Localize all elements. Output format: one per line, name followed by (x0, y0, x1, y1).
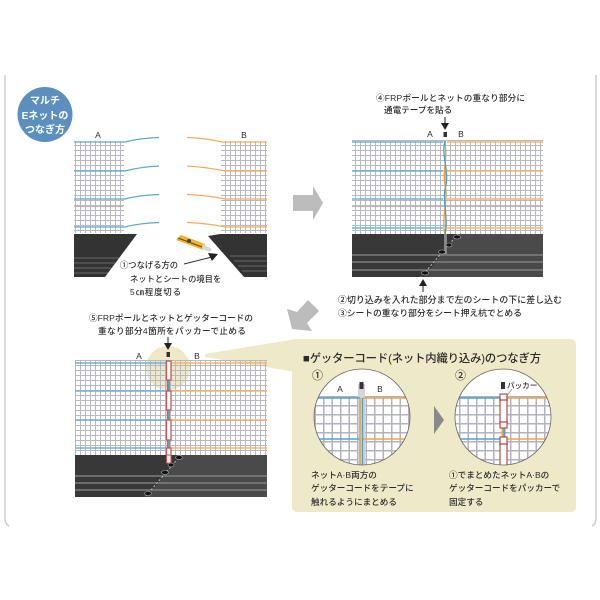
pole with clips (166, 361, 171, 462)
sheet (75, 455, 267, 497)
sheet A (74, 234, 137, 277)
step 4 caption: ④FRPポールとネットの重なり部分に (376, 92, 525, 103)
net (352, 140, 543, 234)
arrow: step 1 to 2 (293, 186, 323, 220)
arrow up to stake (419, 279, 427, 292)
caption 1: ゲッターコードをテープに (311, 482, 414, 493)
step 5 caption: ⑤FRPポールとネットとゲッターコードの (89, 312, 253, 323)
number 2: ② (455, 369, 466, 382)
highlight circle and pointer (146, 339, 296, 390)
step 1 caption (120, 260, 221, 297)
badge: マルチEネットのつなぎ方: つなぎ方 (25, 123, 65, 136)
step 4 caption: 通電テープを貼る (384, 104, 452, 115)
step 2 and 3 captions (338, 294, 562, 318)
step 1 caption: 5㎝程度切る (130, 287, 181, 297)
caption 1: ネットA·B両方の (311, 469, 377, 480)
sheet B (208, 234, 267, 277)
net A (74, 138, 159, 233)
outer frame (5, 75, 596, 526)
step 1 caption: ①つなげる方の (120, 260, 178, 270)
arrow between circles (434, 406, 444, 434)
badge: マルチEネットのつなぎ方: マルチ (30, 95, 60, 107)
label B: B (194, 351, 200, 361)
net B (187, 138, 267, 233)
net (75, 360, 267, 455)
arrow down to pole (441, 117, 449, 130)
circle detail 1: B (377, 384, 383, 394)
step 4 caption (376, 92, 525, 115)
caption 2: 固定する (449, 497, 483, 507)
panel heading: ■ゲッターコード(ネット内織り込み)のつなぎ方 (303, 351, 541, 365)
icon: cutter knife (176, 235, 212, 252)
wires (75, 363, 267, 448)
panel: step 2-4 joined net (352, 140, 543, 277)
step 2 and 3 captions: ②切り込みを入れた部分まで左のシートの下に差し込む (338, 294, 562, 305)
circle detail 2: パッカー (507, 381, 537, 390)
step 1 caption: ネットとシートの境目を (130, 274, 221, 284)
wires (352, 142, 543, 228)
circle detail 1 (314, 369, 410, 468)
number 1: ① (312, 369, 323, 382)
caption 1: 触れるようにまとめる (311, 496, 397, 507)
pole cap (166, 352, 170, 357)
arrow down to pole (164, 337, 172, 350)
sheet (352, 234, 543, 277)
pole cap (444, 132, 447, 137)
caption 1 (311, 469, 414, 507)
circle detail 2 (455, 369, 551, 469)
step 1 arrow (184, 253, 218, 264)
circle detail 1: A (337, 384, 343, 394)
caption 2: ゲッターコードをパッカーで (449, 482, 560, 493)
badge: マルチEネットのつなぎ方 (18, 87, 72, 142)
panel: step 5 fastened net (75, 360, 267, 497)
caption 2 (449, 470, 560, 507)
label B: B (241, 130, 247, 140)
label B: B (458, 129, 464, 139)
label A: A (427, 129, 433, 139)
caption 2: ①でまとめたネットA·Bの (449, 470, 549, 480)
arrow: step 2 to 5 (287, 300, 319, 331)
badge: マルチEネットのつなぎ方: Eネットの (22, 110, 68, 122)
step 5 caption (89, 312, 253, 336)
label A: A (136, 351, 142, 361)
label A: A (95, 130, 101, 140)
step 5 caption: 重なり部分4箇所をパッカーで止める (98, 325, 246, 336)
tape wires (444, 141, 447, 235)
step 2 and 3 captions: ③シートの重なり部分をシート押え杭でとめる (338, 307, 522, 318)
panel: gutter cord connection (292, 339, 576, 512)
panel: step 1 separated nets (74, 138, 267, 277)
